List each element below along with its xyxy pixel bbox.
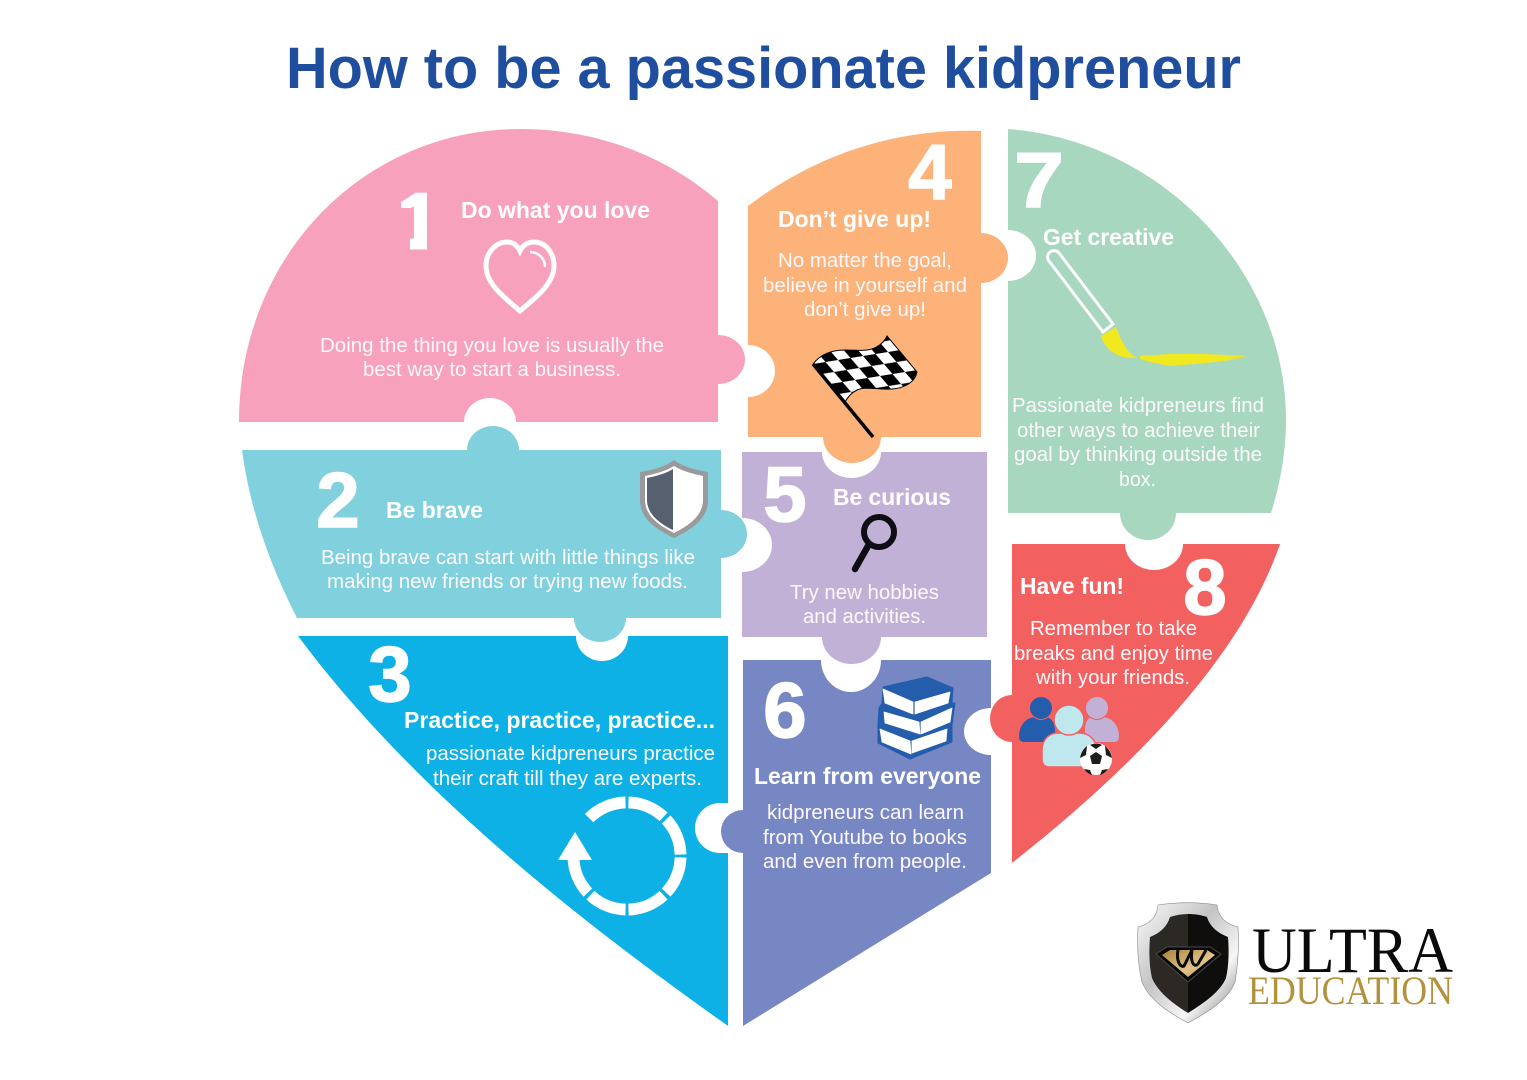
body text 4 xyxy=(763,249,967,321)
heading 8: Have fun! xyxy=(1020,573,1124,599)
body text 5: and activities. xyxy=(803,605,926,628)
body text 8: Remember to take xyxy=(1030,617,1197,640)
heading 5: Be curious xyxy=(833,484,951,510)
infographic canvas xyxy=(239,46,1453,1026)
heading 6: Learn from everyone xyxy=(754,763,981,789)
number 8: 8 xyxy=(1183,543,1227,631)
body text 5: Try new hobbies xyxy=(790,581,939,604)
panel: 1 do what you love xyxy=(239,129,745,422)
body text 2: Being brave can start with little things like xyxy=(321,546,695,569)
body text 6: from Youtube to books xyxy=(763,826,967,849)
number 4: 4 xyxy=(908,128,952,216)
heading 7: Get creative xyxy=(1043,224,1174,250)
heading 2: Be brave xyxy=(386,497,483,523)
icon: paintbrush xyxy=(1048,251,1247,366)
panel: 6 learn from everyone xyxy=(721,660,991,1026)
body text 4: don’t give up! xyxy=(804,298,926,321)
panel: 8 have fun xyxy=(990,543,1280,863)
body text 3 xyxy=(426,742,715,790)
body text 7: other ways to achieve their xyxy=(1017,419,1260,442)
icon: friends and football xyxy=(1019,696,1119,775)
number 2: 2 xyxy=(316,456,360,544)
body text 7: goal by thinking outside the xyxy=(1014,443,1262,466)
body text 6 xyxy=(763,801,967,873)
body text 3: their craft till they are experts. xyxy=(433,767,702,790)
logo wordmark EDUCATION: EDUCATION xyxy=(1248,968,1453,1013)
body text 1: best way to start a business. xyxy=(363,358,621,381)
icon: heart xyxy=(486,242,554,311)
panel: 7 get creative xyxy=(1008,129,1286,540)
panel: 2 be brave xyxy=(242,426,747,642)
title: How to be a passionate kidpreneur xyxy=(286,36,1241,101)
panel: 5 be curious xyxy=(742,450,987,664)
number 1: 1 xyxy=(397,177,441,265)
heading 1: Do what you love xyxy=(461,197,650,223)
logo wordmark ULTRA: ULTRA xyxy=(1252,915,1453,987)
heading 3: Practice, practice, practice... xyxy=(404,707,715,733)
body text 7 xyxy=(1012,394,1264,491)
body text 1: Doing the thing you love is usually the xyxy=(320,334,664,357)
icon: shield xyxy=(640,460,708,538)
number 6: 6 xyxy=(763,666,807,754)
body text 8: with your friends. xyxy=(1035,666,1190,689)
icon: chequered flag xyxy=(813,336,917,437)
body text 3: passionate kidpreneurs practice xyxy=(426,742,715,765)
body text 8 xyxy=(1014,617,1213,689)
number 5: 5 xyxy=(763,450,807,538)
icon: cycle arrow xyxy=(558,802,681,910)
body text 2 xyxy=(321,546,695,593)
icon: magnifying glass xyxy=(855,517,894,569)
body text 6: kidpreneurs can learn xyxy=(767,801,964,824)
number 7: 7 xyxy=(1014,136,1064,224)
body text 4: believe in yourself and xyxy=(763,274,967,297)
body text 2: making new friends or trying new foods. xyxy=(327,570,688,593)
body text 5 xyxy=(790,581,939,628)
panel: 3 practice xyxy=(298,630,728,1026)
body text 7: Passionate kidpreneurs find xyxy=(1012,394,1264,417)
icon: books xyxy=(878,677,955,759)
body text 6: and even from people. xyxy=(763,850,967,873)
body text 7: box. xyxy=(1119,468,1156,491)
heading 4: Don’t give up! xyxy=(778,206,931,232)
number 3: 3 xyxy=(368,630,412,718)
logo: Ultra Education xyxy=(1138,903,1453,1023)
panel: 4 don't give up xyxy=(748,128,1008,463)
body text 4: No matter the goal, xyxy=(778,249,952,272)
body text 1 xyxy=(320,334,664,381)
body text 8: breaks and enjoy time xyxy=(1014,642,1213,665)
logo shield xyxy=(1138,903,1238,1023)
